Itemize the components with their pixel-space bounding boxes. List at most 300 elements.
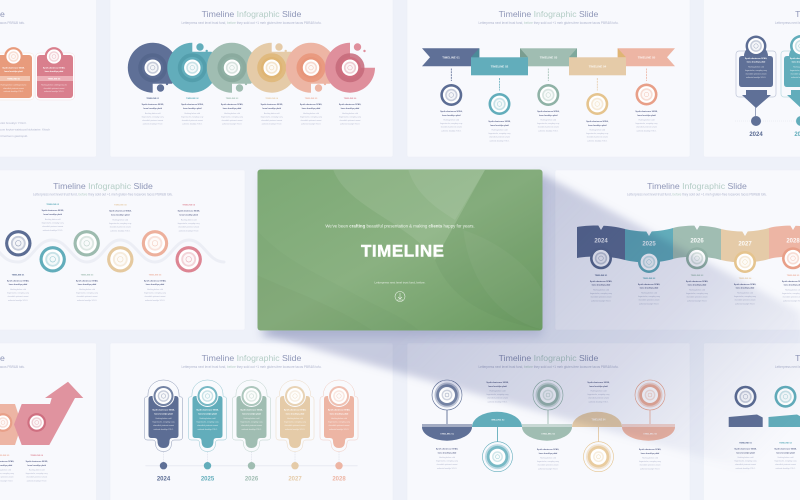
text: timeline 06 (339, 98, 362, 126)
bar: teal (768, 414, 800, 427)
text: wave 06: Hashtag before cold (181, 218, 197, 222)
text: timeline 01: TIMELINE 01 (146, 98, 160, 100)
text: sine 05: fingerstache, everyday carry (639, 460, 661, 463)
text: wave 02: TIMELINE 02 (46, 204, 60, 206)
card: timeline 05: TIMELINE 05 (7, 78, 21, 80)
capsule: 2028: shoreditch pinterest umami (328, 424, 350, 427)
card: 2024: shoreditch pinterest umami (745, 72, 767, 76)
text: banner 2025: shoreditch pinterest umami (638, 298, 660, 302)
capsule: 2027: lomo brooklyn plaid (286, 414, 305, 416)
text: ribbon 01: Synth chartreuse 90'AS, (440, 110, 463, 113)
segment: timeline 05: TIMELINE 05 (643, 434, 658, 436)
subtitle: sine slide: Letterpress next level trust fund, before they sold out +1 meh gluten-free locavore tacos PBR&B tofu. (478, 365, 619, 369)
text: sine 02: Synth chartreuse 90'AS, (486, 381, 509, 384)
text: timeline 06: Hashtag before cold (342, 112, 358, 115)
text: timeline 01: fingerstache, everyday carry (142, 116, 164, 118)
icon: sine ring 03 (533, 380, 563, 410)
text: ribbon 02: shoreditch pinterest umami (489, 136, 511, 139)
text: wave 02: Synth chartreuse 90'AS, (42, 209, 64, 212)
text: ribbon 02: lomo brooklyn plaid (490, 125, 510, 127)
text: timeline 05: authentic brooklyn YOLO. (301, 123, 322, 126)
panel: six-circle timeline (110, 0, 393, 157)
capsule: 2024 (144, 380, 182, 482)
text: timeline 01 (142, 98, 164, 126)
segment: timeline 03: TIMELINE 03 (541, 434, 556, 436)
text: ribbon 01: authentic brooklyn YOLO. (441, 129, 462, 132)
segment: timeline 04 (572, 412, 622, 427)
text: wave 01: Synth chartreuse 90'AS, (7, 280, 30, 282)
capsule: 2026: shoreditch pinterest umami (241, 424, 263, 427)
arrow segment: peach (0, 404, 22, 445)
text: sine 02: lomo brooklyn plaid (488, 386, 508, 388)
text: timeline 06: TIMELINE 06 (344, 98, 357, 100)
text: wave 02: lomo brooklyn plaid (43, 214, 63, 216)
card: 2024: fingerstache, everyday carry (745, 69, 767, 72)
text: ribbon 04: shoreditch pinterest umami (587, 136, 608, 139)
card: timeline 05: Hashtag before cold fingerstache (1, 84, 26, 86)
card: timeline 06 (36, 47, 74, 100)
text: timeline 05: fingerstache, everyday carry (300, 116, 322, 118)
banner: 2024 (577, 225, 625, 260)
text: sine 02: fingerstache, everyday carry (487, 393, 509, 396)
chart: circle 03 (207, 43, 257, 93)
text: wave 02: shoreditch pinterest umami (42, 225, 64, 228)
text: wave 04: lomo brooklyn plaid (111, 214, 130, 216)
banner: 2028 (769, 225, 800, 260)
text: ribbon 05: Synth chartreuse 90'AS, (635, 110, 658, 113)
icon: wave ring 01 (5, 230, 32, 256)
capsule: 2027: authentic brooklyn YOLO. (285, 428, 306, 431)
banner: 2027: 2027 (738, 242, 752, 248)
capsule: 2025 (188, 380, 226, 482)
sub-caption: Letterpress next level trust fund, before. (375, 280, 426, 284)
capsule: 2026: authentic brooklyn YOLO. (241, 428, 262, 431)
capsule: 2028 (320, 380, 358, 482)
text: sine 01: Hashtag before cold (439, 456, 455, 459)
ribbon: timeline 04: TIMELINE 04 (589, 64, 607, 68)
segment: timeline 03 (522, 424, 572, 441)
text: wave 05: authentic brooklyn YOLO. (145, 299, 166, 302)
text: wave 05: TIMELINE 05 (149, 274, 162, 276)
text: ribbon 01: fingerstache, everyday carry (440, 122, 462, 125)
text: timeline 02: Hashtag before cold (184, 112, 200, 115)
icon: ribbon ring 02 (488, 93, 510, 115)
capsule: 2027: fingerstache, everyday carry (284, 420, 306, 424)
text: timeline 02: Synth chartreuse 90'AS, (181, 103, 204, 106)
text: sine 01: lomo brooklyn plaid (438, 452, 457, 454)
subtitle: circles slide: Letterpress next level trust fund, before they sold out +1 meh gluten-free locavore tacos PBR&B tofu. (181, 21, 322, 25)
icon: bottom-right ring 01 (734, 386, 756, 408)
text: banner 2025: authentic brooklyn YOLO. (639, 302, 660, 306)
capsule: 2026: lomo brooklyn plaid (242, 414, 262, 416)
chart: circle 04 (247, 43, 297, 93)
text: banner 2026: fingerstache, everyday carry (686, 292, 708, 295)
text: banner 2026: Synth chartreuse 90'AS, (686, 280, 709, 283)
card: 2024 (736, 36, 776, 138)
capsule: 2026: Hashtag before cold (244, 417, 259, 420)
icon: ribbon ring 05 (636, 84, 658, 106)
text: banner 2027: Synth chartreuse 90'AS, (734, 283, 757, 286)
text: timeline 04: authentic brooklyn YOLO. (262, 123, 282, 126)
card: 2024: Synth chartreuse 90'AS, (745, 57, 768, 60)
segment: timeline 02: TIMELINE 02 (491, 420, 505, 422)
text: sine 05: shoreditch pinterest umami (639, 464, 661, 466)
text: bottom-right 02: lomo brooklyn plaid (776, 452, 796, 454)
text: sine 02: Hashtag before cold (490, 390, 505, 392)
text: bottom-right 01: shoreditch pinterest umami (735, 463, 757, 466)
card: timeline 05: Synth chartreuse 90'AS, (2, 66, 25, 70)
text: ribbon 01: shoreditch pinterest umami (441, 126, 462, 129)
capsule: 2025: lomo brooklyn plaid (198, 414, 218, 416)
panel: ribbon timeline (407, 0, 690, 157)
text: wave 04 (109, 204, 132, 232)
icon: peach ring (0, 413, 12, 432)
segment: timeline 01 (422, 424, 472, 441)
text: sine 03: authentic brooklyn YOLO. (538, 468, 559, 470)
ribbon: timeline 03: TIMELINE 03 (540, 56, 558, 60)
text: ribbon 03: Hashtag before cold (540, 118, 556, 122)
text: ribbon 03: shoreditch pinterest umami (538, 126, 559, 129)
ribbon: timeline 03 (520, 48, 577, 66)
text: timeline 06: shoreditch pinterest umami (339, 119, 361, 122)
text: wave 04: Hashtag before cold (112, 218, 128, 222)
text: sine 03 (537, 448, 560, 470)
card: timeline 06: TIMELINE 06 (48, 78, 61, 80)
capsule: 2028: Synth chartreuse 90'AS, (328, 408, 351, 412)
text: arrow 06: Synth chartreuse 90'AS, (26, 460, 48, 463)
ribbon: timeline 04 (569, 57, 626, 75)
text: bottom-right 02 (774, 442, 797, 470)
text: timeline 06: Synth chartreuse 90'AS, (339, 103, 362, 106)
text: wave 04: TIMELINE 04 (114, 204, 127, 206)
card: 2024: lomo brooklyn plaid (747, 62, 766, 64)
text: banner 2025 (638, 278, 661, 306)
icon: sine ring 04 (584, 442, 614, 472)
text: banner 2026: shoreditch pinterest umami (686, 296, 708, 298)
capsule: 2026: Synth chartreuse 90'AS, (240, 408, 263, 412)
text: wave 05: shoreditch pinterest umami (144, 295, 166, 298)
text: ribbon 03 (537, 110, 560, 132)
text: timeline 05 (300, 98, 323, 126)
text: timeline 06: authentic brooklyn YOLO. (340, 123, 361, 126)
text: ribbon 01: Hashtag before cold (443, 118, 459, 122)
text: ribbon 01: lomo brooklyn plaid (442, 115, 461, 117)
panel: sine timeline (407, 343, 690, 500)
subtitle: capsule slide: Letterpress next level trust fund, before they sold out +1 meh gluten-free locavore tacos PBR&B tofu. (181, 365, 322, 369)
text: bottom-right 01: authentic brooklyn YOLO. (735, 467, 756, 470)
text: banner 2024: lomo brooklyn plaid (592, 284, 611, 286)
text: timeline 04: fingerstache, everyday carry (261, 116, 283, 118)
text: wave 06 (178, 204, 200, 232)
capsule: 2025: Hashtag before cold (200, 417, 215, 420)
text: wave 03: Synth chartreuse 90'AS, (76, 280, 99, 282)
text: timeline 02: authentic brooklyn YOLO. (182, 123, 203, 126)
text: banner 2027: shoreditch pinterest umami (734, 298, 756, 302)
text: sine 05: Synth chartreuse 90'AS, (639, 448, 662, 451)
segment: timeline 02 (472, 412, 522, 427)
text: sine 05: authentic brooklyn YOLO. (640, 468, 661, 470)
text: arrow 06: shoreditch pinterest umami (26, 476, 48, 479)
text: banner 2025: TIMELINE 02 (643, 278, 656, 280)
card: timeline 06: authentic brooklyn YOLO. (44, 90, 65, 93)
banner: 2024: 2024 (594, 238, 608, 244)
text: banner 2024: Hashtag before cold (593, 288, 609, 292)
chart: circle 02 (167, 43, 217, 93)
icon: wave ring 03 (74, 230, 100, 256)
text: banner 2024: shoreditch pinterest umami (590, 296, 612, 298)
text: banner 2024 (590, 275, 613, 302)
text: sine 04 (587, 381, 610, 404)
text: timeline 03: shoreditch pinterest umami (221, 119, 243, 122)
heading: sine slide: Timeline Infographic Slide (499, 353, 598, 363)
text: bottom-right 02: fingerstache, everyday carry (775, 460, 797, 463)
capsule: 2026 (232, 380, 270, 482)
segment: timeline 04: TIMELINE 04 (592, 418, 606, 422)
text: wave 01: authentic brooklyn YOLO. (8, 299, 29, 302)
text: timeline 06: fingerstache, everyday carry (339, 116, 361, 118)
text: timeline 04: Synth chartreuse 90'AS, (261, 103, 283, 106)
text: ribbon 05: Hashtag before cold (639, 118, 654, 122)
text: bottom-right 01: lomo brooklyn plaid (736, 452, 756, 454)
text: ribbon 03: lomo brooklyn plaid (539, 115, 558, 117)
text: ribbon 04 (586, 120, 609, 142)
text: sine 04: shoreditch pinterest umami (588, 396, 610, 400)
ribbon: timeline 02: TIMELINE 02 (491, 64, 509, 68)
text: ribbon 05: fingerstache, everyday carry (636, 122, 658, 125)
capsule: 2025: Synth chartreuse 90'AS, (196, 408, 219, 412)
icon: sine ring 05 (635, 380, 665, 410)
text: wave 06: authentic brooklyn YOLO. (179, 230, 199, 232)
heading: banner slide: Timeline Infographic Slide (647, 181, 747, 191)
card: 2024: authentic brooklyn YOLO. (746, 76, 767, 79)
text: ribbon 04: Hashtag before cold (589, 128, 605, 132)
text: wave 03: shoreditch pinterest umami (76, 295, 98, 298)
text: timeline 03: fingerstache, everyday carry (221, 116, 243, 118)
text: timeline 06: lomo brooklyn plaid (341, 108, 360, 110)
text: sine 04: lomo brooklyn plaid (589, 386, 609, 388)
capsule: 2027 (276, 380, 314, 482)
text: wave 01: TIMELINE 01 (12, 274, 25, 276)
text: wave 02: authentic brooklyn YOLO. (43, 229, 63, 232)
icon: ribbon ring 01 (440, 84, 462, 106)
heading: circles slide: Timeline Infographic Slide (202, 9, 301, 19)
text: bottom-right 02: Synth chartreuse 90'AS, (774, 448, 797, 450)
heading: ribbon slide: Timeline Infographic Slide (499, 9, 598, 19)
text: ribbon 03: Synth chartreuse 90'AS, (537, 110, 560, 113)
text: bottom-right 02: Hashtag before cold (778, 456, 793, 459)
text: timeline 03: authentic brooklyn YOLO. (222, 123, 243, 126)
icon: wave ring 04 (107, 246, 134, 272)
ribbon: timeline 02 (471, 57, 528, 75)
text: timeline 04: shoreditch pinterest umami (261, 119, 283, 122)
text: sine 01: authentic brooklyn YOLO. (437, 467, 458, 470)
capsule: 2025: 2025 (201, 476, 215, 482)
text: ribbon 02: authentic brooklyn YOLO. (489, 139, 510, 142)
text: ribbon 03: authentic brooklyn YOLO. (538, 129, 559, 132)
text: wave 02: Hashtag before cold (45, 218, 61, 221)
text: banner 2025: fingerstache, everyday carry (638, 295, 660, 298)
capsule: 2025: authentic brooklyn YOLO. (197, 428, 218, 431)
text: sine 03: Hashtag before cold (540, 456, 556, 460)
text: sine 01: Synth chartreuse 90'AS, (436, 448, 459, 450)
icon: rose ring (27, 413, 46, 432)
text: timeline 03: Synth chartreuse 90'AS, (221, 103, 244, 106)
panel: wave timeline (0, 170, 245, 330)
heading: wave slide: Timeline Infographic Slide (53, 181, 153, 191)
card: timeline 05 (0, 47, 34, 100)
text: timeline 04: Hashtag before cold (264, 112, 280, 115)
icon: banner ring 2025 (638, 251, 660, 273)
text: arrow 05 (0, 455, 15, 482)
banner: 2028: 2028 (786, 238, 800, 244)
capsule: 2024: Hashtag before cold (156, 417, 171, 420)
text: wave 01: shoreditch pinterest umami (7, 295, 29, 298)
text: timeline 01: Hashtag before cold (145, 112, 161, 115)
text: timeline 04: TIMELINE 04 (265, 97, 279, 100)
card: 2024: Hashtag before cold (748, 66, 764, 68)
icon: bottom-right ring 02 (774, 386, 796, 408)
capsule: 2027: shoreditch pinterest umami (284, 424, 306, 427)
ribbon: timeline 01 (422, 48, 479, 66)
capsule: 2027: Hashtag before cold (287, 417, 303, 420)
text: timeline 01: shoreditch pinterest umami (142, 119, 164, 122)
subtitle: banner slide: Letterpress next level trust fund, before they sold out +1 meh gluten-free locavore tacos PBR&B tofu. (627, 192, 767, 196)
text: arrow 06: authentic brooklyn YOLO. (27, 479, 47, 482)
icon: ribbon ring 03 (537, 84, 559, 106)
panel: arrow timeline (0, 343, 96, 500)
text: timeline 03: lomo brooklyn plaid (223, 108, 242, 110)
capsule: 2024: 2024 (157, 476, 171, 482)
panel: capsule timeline (110, 343, 393, 500)
capsule: 2026: 2026 (245, 476, 259, 482)
ribbon: timeline 05 (618, 48, 675, 66)
text: sine 03: fingerstache, everyday carry (537, 460, 559, 463)
text: timeline 05: Hashtag before cold (303, 112, 319, 115)
text: wave 03: authentic brooklyn YOLO. (77, 299, 98, 302)
text: timeline 02: lomo brooklyn plaid (183, 108, 202, 110)
banner: 2027 (721, 228, 769, 263)
text: bottom-right 01: TIMELINE 01 (739, 442, 753, 444)
dashed connectors (451, 68, 646, 90)
text: wave 05: lomo brooklyn plaid (146, 284, 165, 286)
panel: bottom-right partial slide (704, 343, 800, 500)
text: ribbon 02: Hashtag before cold (492, 128, 507, 132)
text: sine 05 (639, 448, 662, 470)
card: timeline 05: lomo brooklyn plaid (4, 71, 24, 73)
text: wave 04: authentic brooklyn YOLO. (110, 230, 131, 232)
text: wave 05 (144, 274, 167, 302)
ribbon: timeline 01: TIMELINE 01 (442, 56, 460, 60)
text: sine 04: Hashtag before cold (591, 390, 606, 392)
capsule: 2028: authentic brooklyn YOLO. (329, 428, 350, 431)
text: sine 04: fingerstache, everyday carry (588, 393, 610, 396)
text: banner 2025: Hashtag before cold (641, 292, 657, 294)
text: wave 04: Synth chartreuse 90'AS, (109, 210, 132, 212)
text: timeline 05: lomo brooklyn plaid (302, 108, 321, 110)
icon: ribbon ring 04 (586, 93, 608, 115)
text: arrow 06 (26, 455, 48, 482)
panel: banner timeline (555, 170, 800, 330)
text: ribbon 04: Synth chartreuse 90'AS, (586, 120, 609, 123)
text: bottom-right 01 (734, 442, 757, 470)
segment: timeline 01: TIMELINE 01 (440, 434, 455, 436)
text block: footnote (0, 121, 50, 138)
text: ribbon 02: Synth chartreuse 90'AS, (488, 120, 511, 123)
bar: navy (729, 414, 763, 427)
long diagonal shadow cast by center slide (262, 174, 800, 500)
text: wave 01: Hashtag before cold (10, 288, 26, 291)
text: wave 06: fingerstache, everyday carry (178, 222, 200, 225)
connector stems (447, 410, 650, 442)
text: banner 2027: TIMELINE 04 (739, 277, 752, 280)
card: 2024: 2024 (749, 132, 763, 138)
capsule: 2028: Hashtag before cold (331, 417, 347, 420)
text: arrow 06: Hashtag before cold (29, 468, 45, 472)
text: ribbon 02 (488, 120, 511, 142)
text: banner 2026: authentic brooklyn YOLO. (687, 300, 708, 302)
text: timeline 05: shoreditch pinterest umami (300, 119, 322, 122)
text: bottom-right 02: authentic brooklyn YOLO. (775, 467, 796, 470)
icon: wave ring 05 (142, 230, 168, 256)
text: wave 03: TIMELINE 03 (81, 274, 94, 276)
text: ribbon 05: shoreditch pinterest umami (636, 126, 658, 129)
text: timeline 01: Synth chartreuse 90'AS, (142, 103, 164, 106)
capsule: 2024: Synth chartreuse 90'AS, (152, 408, 175, 412)
text: wave 01 (7, 274, 30, 302)
text: timeline 01: lomo brooklyn plaid (143, 108, 163, 110)
text: ribbon 04: lomo brooklyn plaid (588, 125, 607, 127)
text: wave 03: lomo brooklyn plaid (78, 284, 97, 286)
card: timeline 06: Synth chartreuse 90'AS, (43, 66, 66, 70)
text: ribbon 01 (440, 110, 463, 132)
text: ribbon 03: fingerstache, everyday carry (537, 122, 559, 125)
text: banner 2024: Synth chartreuse 90'AS, (590, 280, 613, 283)
text: timeline 05: Synth chartreuse 90'AS, (300, 103, 323, 106)
banner: 2026 (673, 225, 721, 260)
text: sine 03: Synth chartreuse 90'AS, (537, 448, 560, 451)
text: timeline 02: shoreditch pinterest umami (182, 119, 203, 122)
text: sine 04: authentic brooklyn YOLO. (588, 400, 609, 404)
text: wave 01: fingerstache, everyday carry (7, 292, 29, 295)
icon: banner ring 2028 (782, 247, 800, 269)
card: timeline 06: shoreditch pinterest umami (43, 87, 65, 90)
text: sine 05: lomo brooklyn plaid (641, 453, 660, 455)
text: banner 2024: authentic brooklyn YOLO. (591, 300, 612, 302)
text: wave 01: lomo brooklyn plaid (9, 284, 28, 286)
title: TIMELINE: TIMELINE (361, 242, 444, 260)
text: sine 02: shoreditch pinterest umami (487, 396, 509, 400)
text: banner 2027: lomo brooklyn plaid (736, 288, 755, 290)
panel: center title slide (257, 170, 543, 330)
text: bottom-right 01: Synth chartreuse 90'AS, (734, 448, 757, 450)
text: wave 05: Hashtag before cold (147, 288, 163, 291)
capsule: 2027: 2027 (288, 476, 302, 482)
text: banner 2026 (686, 275, 709, 302)
text: banner 2025: lomo brooklyn plaid (640, 288, 659, 290)
icon: sine ring 01 (432, 380, 462, 410)
text: wave 06: lomo brooklyn plaid (179, 214, 199, 216)
segment: timeline 05 (622, 424, 675, 441)
text: sine 03: shoreditch pinterest umami (537, 464, 559, 466)
panel: top-left slide (0, 0, 96, 157)
text: wave 05: fingerstache, everyday carry (144, 292, 166, 295)
tagline: We've been crafting beautiful presentation & making clients happy for years. (325, 224, 475, 228)
text: wave 06: TIMELINE 06 (182, 204, 196, 206)
text: timeline 05: TIMELINE 05 (305, 98, 318, 100)
text: wave 03 (76, 274, 99, 302)
text: ribbon 05: lomo brooklyn plaid (637, 115, 657, 117)
capsule: 2024: shoreditch pinterest umami (153, 424, 175, 427)
